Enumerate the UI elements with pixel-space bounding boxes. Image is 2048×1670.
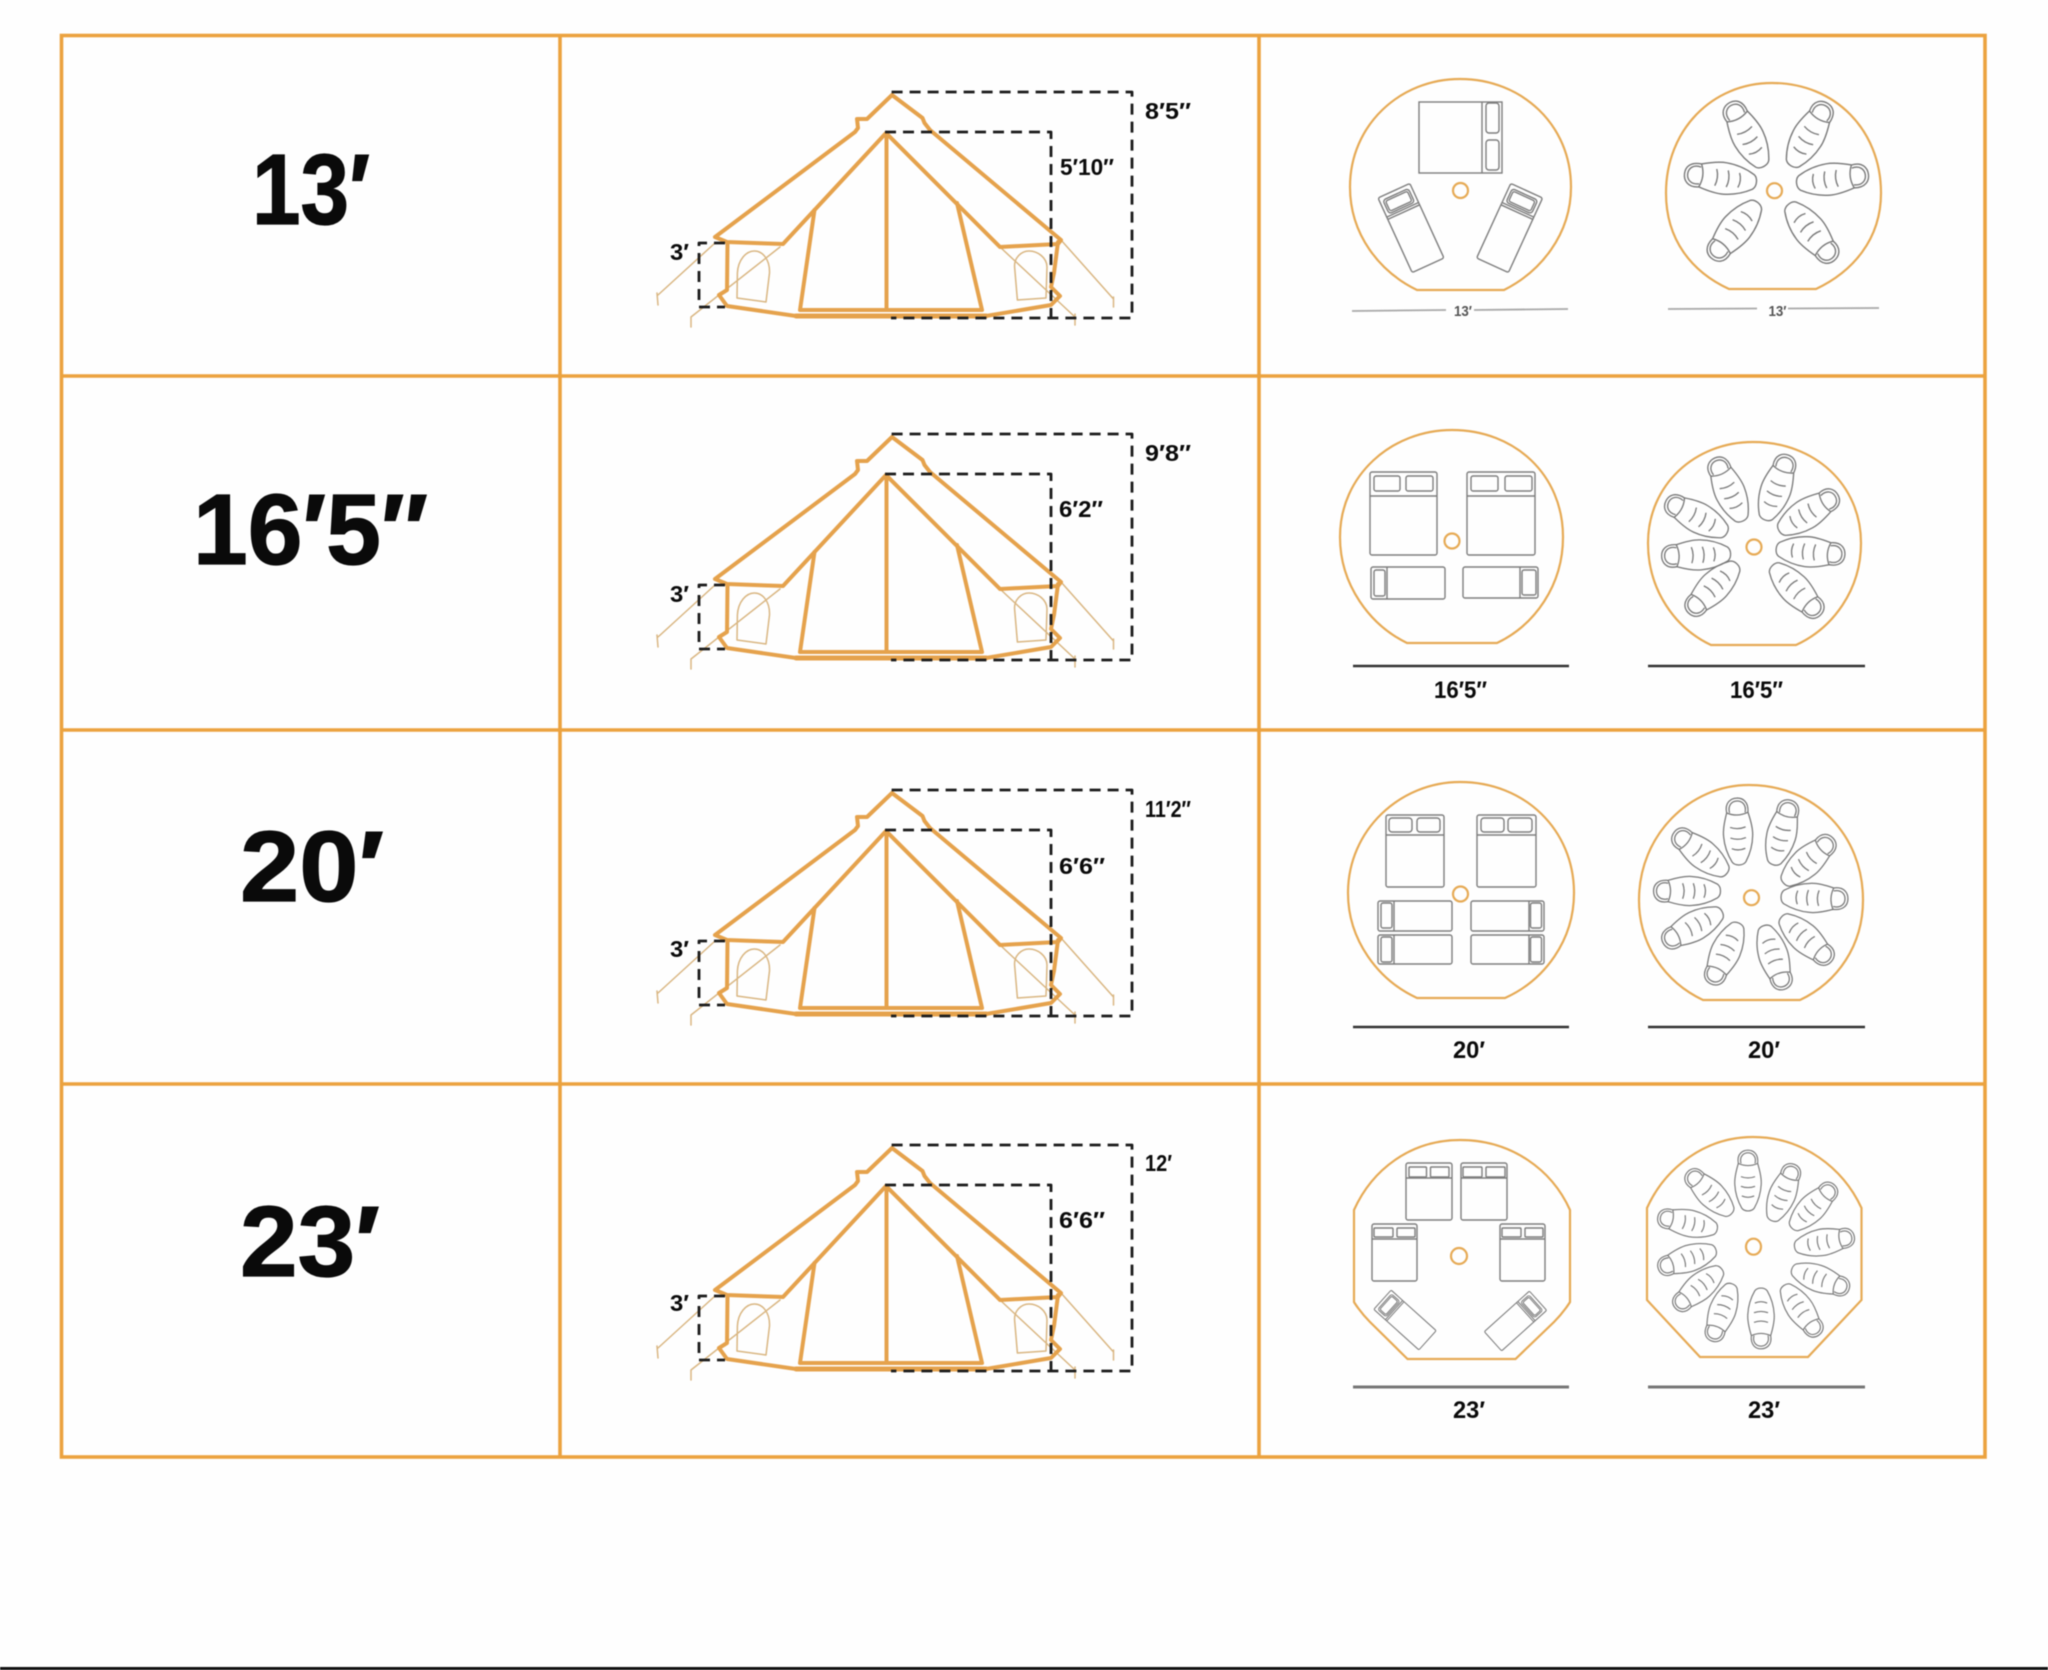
tent elevation diagram 20 [657, 790, 1191, 1025]
size label 13: 13′ [252, 134, 370, 246]
tent elevation diagram 13: 5′10″ [1060, 154, 1114, 180]
floor plan: sleeping bags 20 [1639, 785, 1865, 1064]
row 3: 20 foot tent [240, 782, 1865, 1064]
row 4: 23 foot tent [240, 1137, 1865, 1424]
row 1: 13 foot tent [252, 79, 1881, 327]
tent elevation diagram 16'5": 6′2″ [1059, 496, 1103, 522]
floor plan: sleeping bags 13: 13′ [1768, 303, 1787, 320]
floor plan: beds 13: 13′ [1454, 303, 1472, 320]
floor plan: beds 13 [1350, 79, 1571, 320]
tent elevation diagram 16'5" [657, 434, 1191, 669]
floor plan: sleeping bags 16'5": 16′5″ [1730, 677, 1783, 704]
tent elevation diagram 16'5": 9′8″ [1145, 440, 1191, 466]
tent elevation diagram 23: 3′ [670, 1290, 689, 1316]
floor plan: sleeping bags 23 [1647, 1137, 1865, 1424]
bottom edge strip [0, 1667, 2048, 1670]
row 2: 16 foot 5 tent [193, 430, 1865, 704]
tent elevation diagram 20: 11′2″ [1145, 796, 1191, 822]
tent elevation diagram 23: 6′6″ [1059, 1207, 1105, 1233]
floor plan: beds 16'5" [1340, 430, 1569, 704]
size label 20: 20′ [240, 811, 384, 923]
tent elevation diagram 13: 8′5″ [1145, 98, 1191, 124]
floor plan: beds 20 [1348, 782, 1574, 1064]
floor plan: sleeping bags 13 [1666, 83, 1881, 320]
floor plan: beds 23 [1353, 1140, 1570, 1424]
floor plan: beds 23: 23′ [1453, 1397, 1485, 1424]
floor plan: sleeping bags 20: 20′ [1748, 1037, 1780, 1064]
tent elevation diagram 16'5": 3′ [670, 581, 689, 607]
size label 16'5": 16′5″ [193, 474, 428, 586]
floor plan: beds 20: 20′ [1453, 1037, 1485, 1064]
floor plan: sleeping bags 23: 23′ [1748, 1397, 1780, 1424]
tent elevation diagram 23 [657, 1145, 1172, 1380]
tent elevation diagram 20: 6′6″ [1059, 853, 1105, 879]
floor plan: sleeping bags 16'5" [1648, 442, 1865, 704]
tent elevation diagram 23: 12′ [1145, 1150, 1172, 1176]
size label 23: 23′ [240, 1186, 380, 1298]
table grid [61, 35, 1985, 1457]
tent elevation diagram 13 [657, 92, 1191, 327]
floor plan: beds 16'5": 16′5″ [1434, 677, 1487, 704]
tent elevation diagram 13: 3′ [670, 239, 689, 265]
tent elevation diagram 20: 3′ [670, 936, 689, 962]
